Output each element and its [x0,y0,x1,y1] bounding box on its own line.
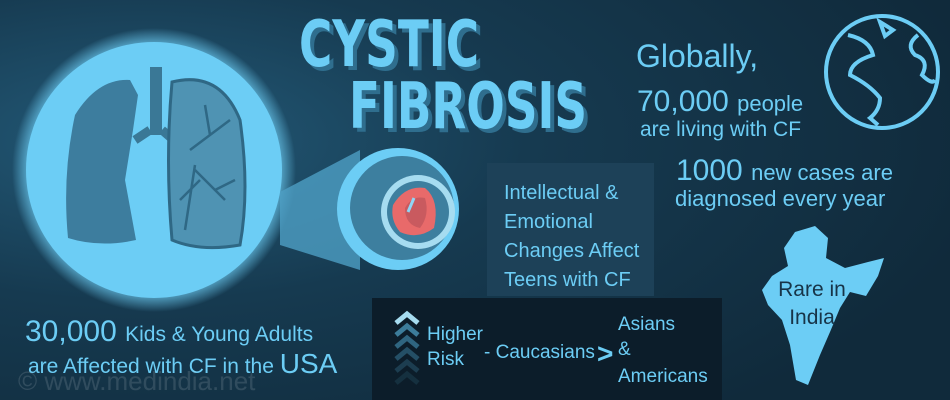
text: USA [25,315,338,379]
icon: India map [762,226,884,385]
icon: magnified airway [337,148,459,270]
beam to magnifier [280,150,360,270]
icon: India map: Rare in [778,278,846,301]
title: FIBROSIS [353,74,591,148]
text: USA: 30,000 Kids & Young Adults [25,315,313,348]
panel: risk: Higher [427,324,484,345]
text: globally: Globally, [636,38,758,74]
panel: risk: - Caucasians [484,342,595,363]
watermark: © www.medindia.net [18,366,256,396]
text: USA: are Affected with CF in the USA [28,348,338,379]
lung circle [12,28,360,312]
panel: teens: Changes Affect [504,240,640,262]
text: new cases [675,154,893,211]
title: FIBROSIS [349,70,587,144]
panel: risk [372,298,722,400]
panel: risk: > [597,338,613,369]
panel: risk: Americans [618,366,708,387]
title [299,8,591,148]
panel: teens [487,163,654,296]
title: CYSTIC [299,8,479,82]
icon: globe [826,16,938,128]
icon: chevrons [396,314,418,383]
panel: risk: Asians [618,314,675,335]
icon: India map: India [789,306,835,329]
text: new cases: 1000 new cases are [676,154,893,187]
text: globally: are living with CF [640,118,801,141]
text: globally: 70,000 people [637,85,803,118]
title: CYSTIC [303,12,483,86]
panel: teens: Intellectual & [504,182,619,204]
text: globally [636,38,803,141]
panel: risk: & [618,339,631,360]
text: new cases: diagnosed every year [675,186,885,211]
panel: risk: Risk [427,349,464,370]
icon: lungs [66,67,245,248]
panel: teens: Teens with CF [504,269,631,291]
panel: teens: Emotional [504,211,593,233]
